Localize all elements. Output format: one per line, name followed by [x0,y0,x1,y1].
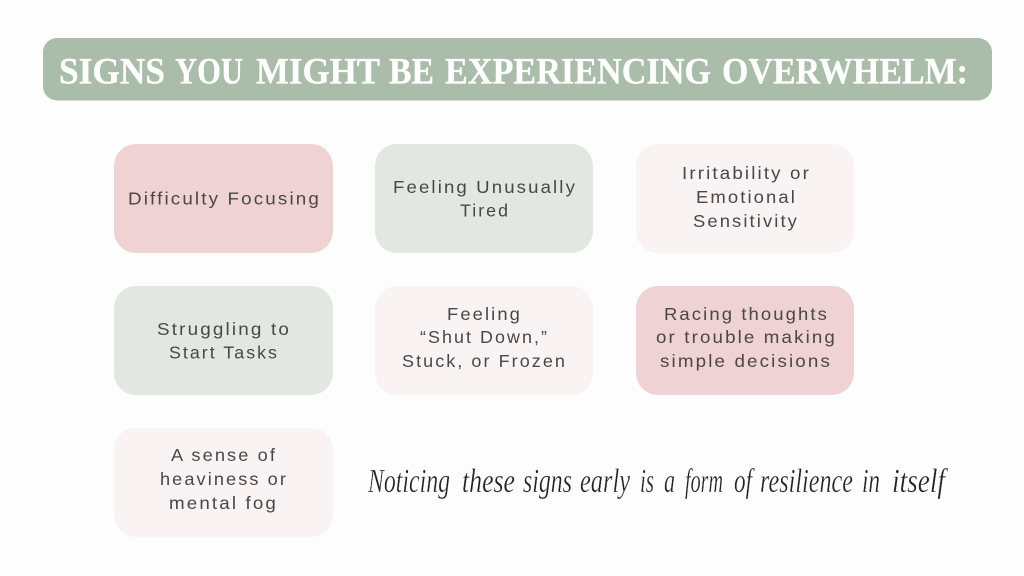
card: irritability or emotional sensitivity [636,144,854,253]
handwritten closing note: resilience [760,463,853,500]
title text: MIGHT [256,52,380,92]
handwritten closing note: signs [523,463,572,500]
title text: BE [389,52,434,92]
card: struggling to start tasks [114,286,333,395]
card: racing thoughts [636,286,854,395]
card: feeling shut down, stuck, or frozen: Feeling [447,304,522,324]
handwritten closing note: in [862,463,880,500]
card: irritability or emotional sensitivity: Emotional [696,187,797,207]
handwritten closing note: is [640,463,654,500]
title text: OVERWHELM: [722,52,968,92]
card: irritability or emotional sensitivity: Irritability or [682,163,811,183]
card: heaviness or mental fog: A sense of [171,445,277,465]
title text [59,52,968,92]
card: difficulty focusing: Difficulty Focusing [128,188,321,208]
card: feeling shut down, stuck, or frozen: “Shut Down,” [420,327,549,347]
title banner [43,38,992,100]
handwritten closing note: form [685,463,723,500]
handwritten closing note: of [734,463,755,500]
card: feeling shut down, stuck, or frozen [375,286,593,395]
card: heaviness or mental fog: heaviness or [160,469,288,489]
card: heaviness or mental fog: mental fog [169,493,278,513]
handwritten closing note: these [462,463,515,500]
card: racing thoughts: or trouble making [656,327,837,347]
handwritten closing note: early [580,463,631,500]
card: racing thoughts: Racing thoughts [664,304,829,324]
card: heaviness or mental fog [114,428,333,537]
card: struggling to start tasks: Start Tasks [169,342,279,362]
card: difficulty focusing [114,144,333,253]
card: racing thoughts: simple decisions [660,351,832,371]
handwritten closing note [367,463,949,500]
title text: YOU [175,52,243,92]
title text: EXPERIENCING [445,52,711,92]
handwritten closing note: a [664,463,675,500]
title text: SIGNS [59,52,165,92]
handwritten closing note: itself [892,463,949,500]
card: irritability or emotional sensitivity: Sensitivity [693,211,799,231]
card: feeling shut down, stuck, or frozen: Stuck, or Frozen [402,351,567,371]
card: feeling unusually tired: Feeling Unusually [393,177,577,197]
card: feeling unusually tired [375,144,593,253]
handwritten closing note: Noticing [367,463,450,500]
card: struggling to start tasks: Struggling to [157,319,291,339]
card: feeling unusually tired: Tired [460,200,510,220]
